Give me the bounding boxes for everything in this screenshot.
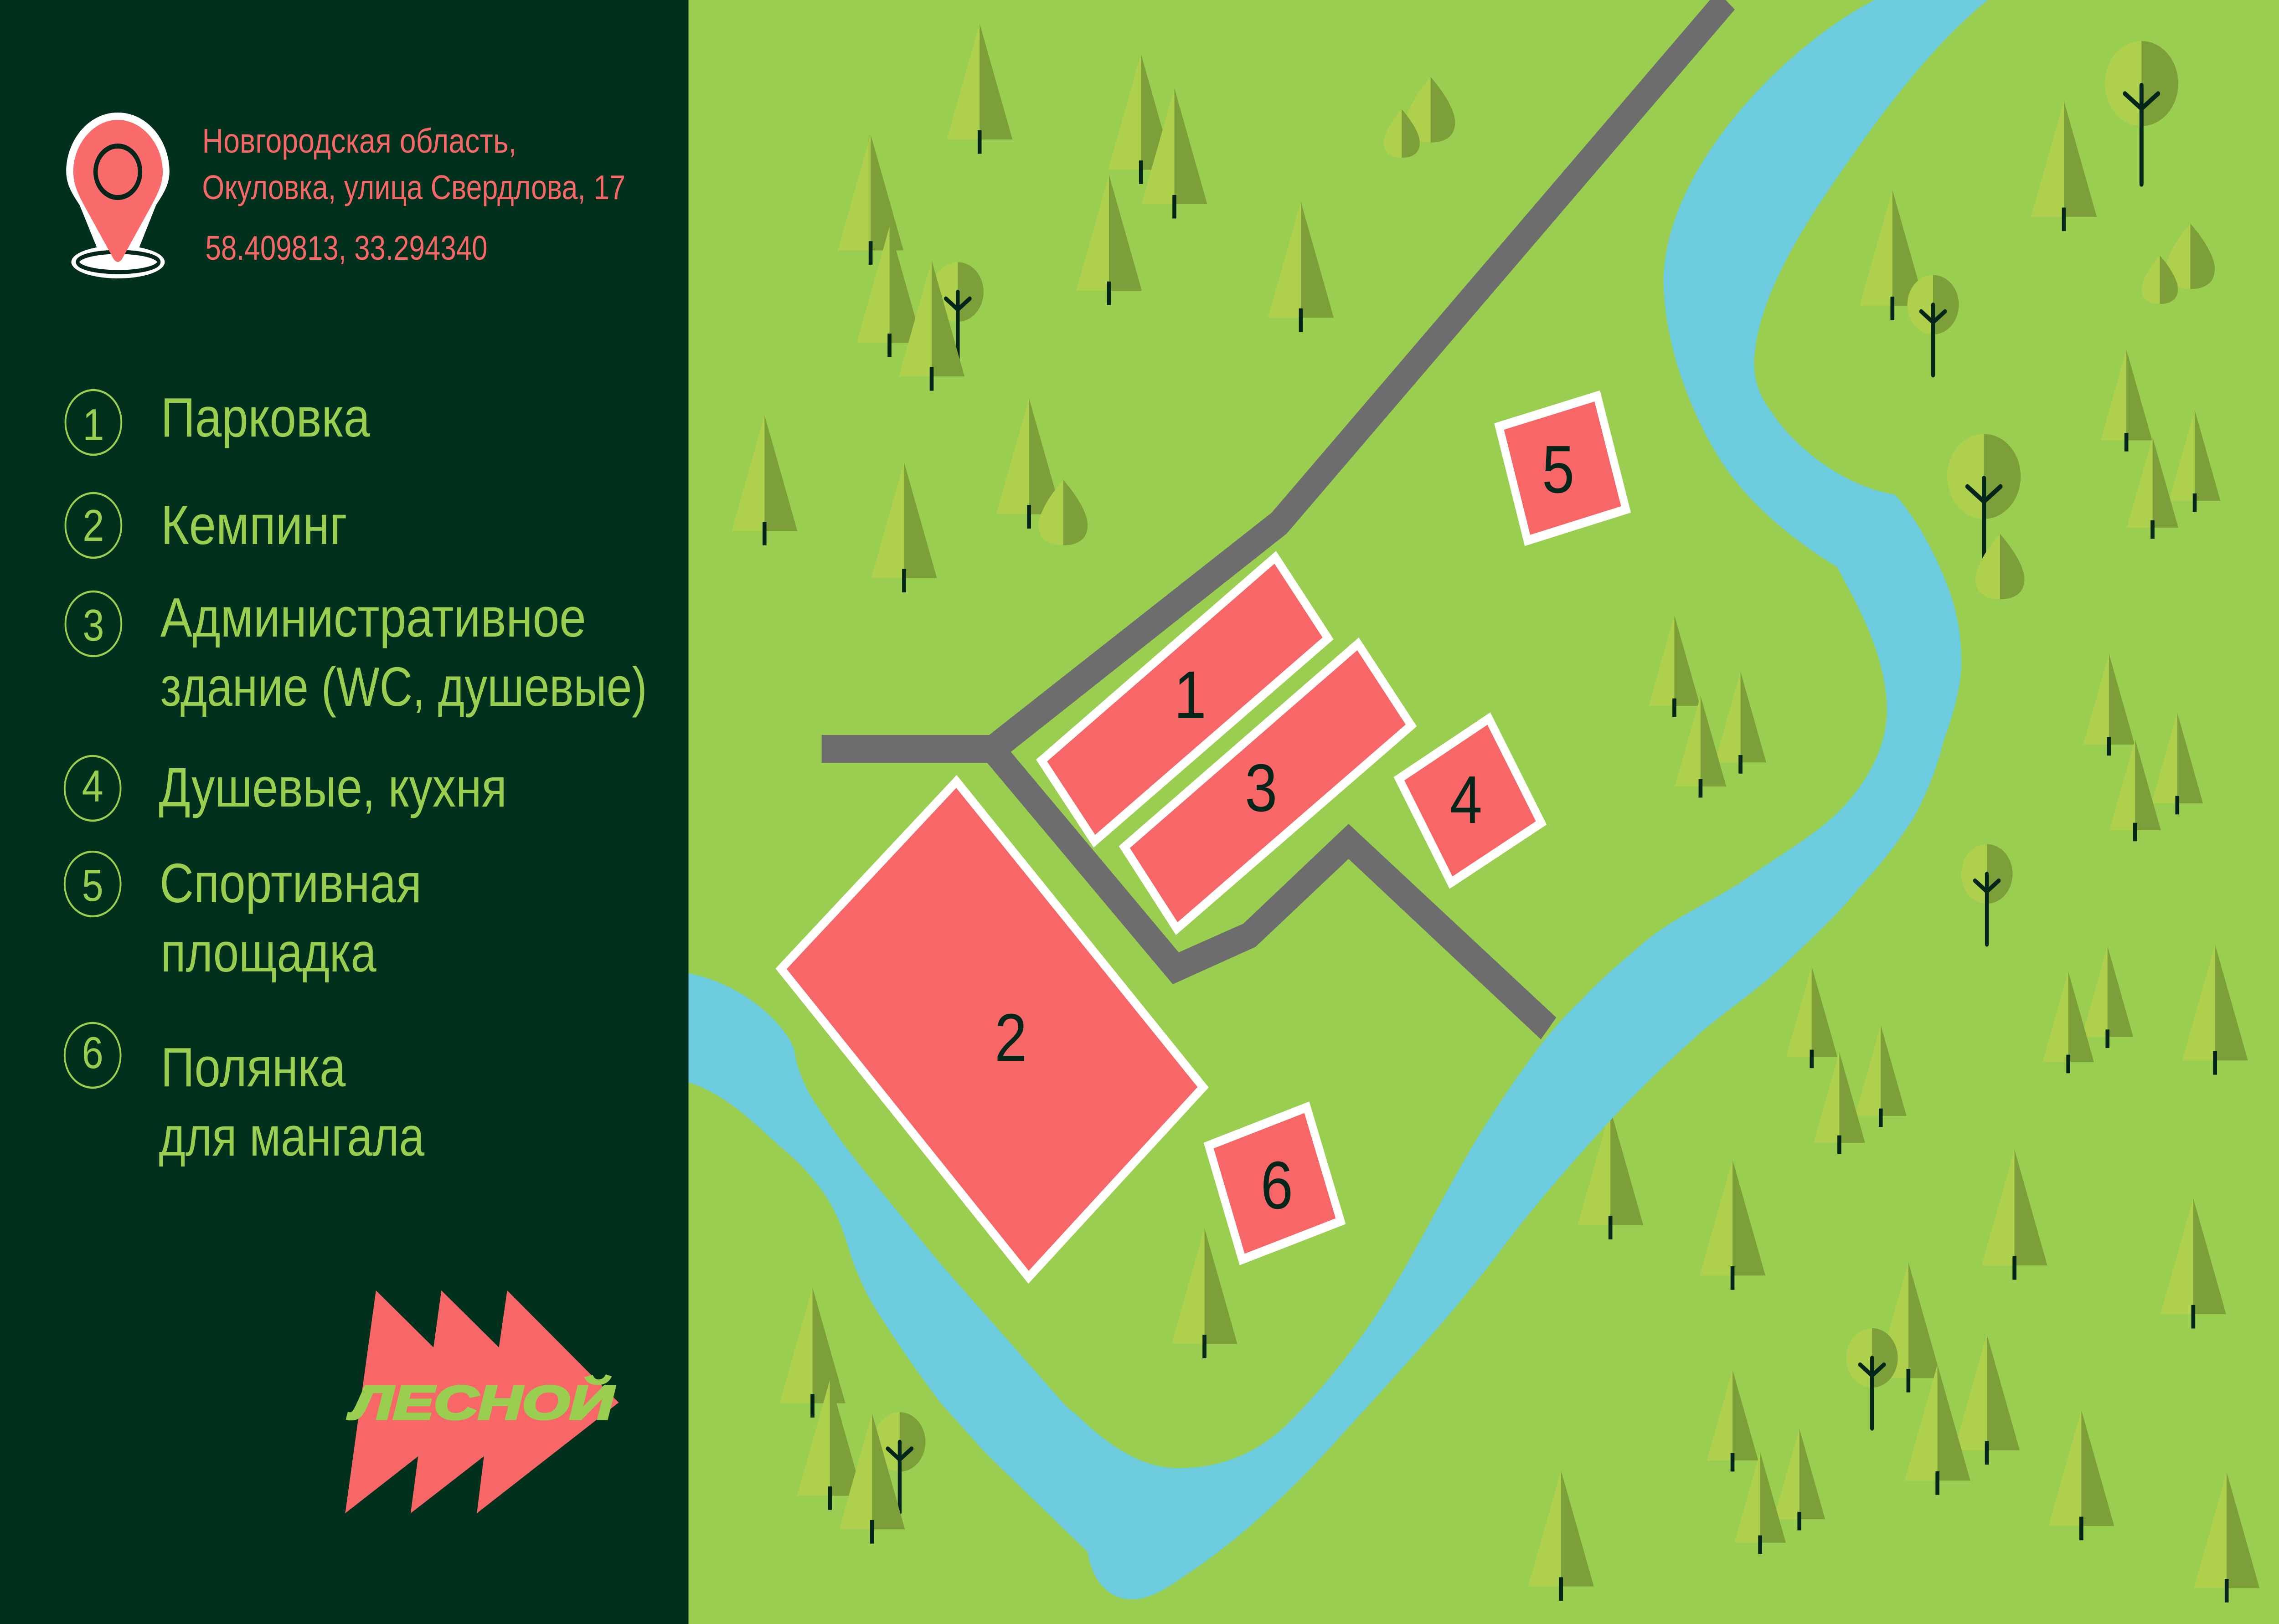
icon: fir tree [1700, 1160, 1765, 1290]
panel: sidebar [0, 0, 688, 1624]
icon: fir tree [1905, 1365, 1970, 1495]
legend item 6: для мангала [159, 1106, 425, 1168]
legend item 5: 5 [82, 861, 103, 910]
icon: fir tree small [2109, 740, 2161, 841]
icon: fir tree [1268, 202, 1334, 332]
legend item 6 [65, 1023, 425, 1168]
legend item 2: Кемпинг [161, 494, 347, 556]
river [670, 0, 1988, 1599]
zone 6: barbecue glade [1209, 1107, 1341, 1259]
icon: fir tree [1954, 1334, 2020, 1465]
icon: fir tree [1141, 88, 1207, 218]
icon: fir tree [779, 1287, 846, 1418]
address and coordinates [202, 122, 625, 267]
legend item 2: 2 [82, 501, 104, 550]
zone 5: sports ground: 5 [1542, 432, 1574, 507]
icon: bush large [1039, 480, 1088, 545]
icon: fir tree [1876, 1262, 1941, 1393]
icon: fir tree [2160, 1198, 2226, 1328]
icon: fir tree [797, 1380, 863, 1510]
legend item 3: 3 [82, 601, 104, 650]
icon: fir tree small [1774, 1429, 1825, 1530]
legend item 3: Административное [160, 587, 586, 649]
legend item 2 [66, 493, 347, 558]
icon: round tree [1908, 275, 1959, 375]
icon: round tree [1961, 844, 2013, 945]
icon: fir tree small [2101, 349, 2152, 452]
icon: fir tree small [1649, 615, 1700, 717]
zone 2: camping [781, 781, 1203, 1277]
icon: fir tree [1171, 1228, 1237, 1358]
address and coordinates: Новгородская область, [202, 122, 516, 160]
icon: fir tree [732, 415, 797, 545]
legend item 5: Спортивная [160, 853, 422, 915]
legend item 1 [66, 387, 370, 455]
icon: round tree [874, 1412, 925, 1512]
icon: bush large [2166, 224, 2215, 289]
icon: round tree [932, 262, 984, 363]
zone 3: admin building [1124, 644, 1411, 929]
icon: bush small [2142, 256, 2178, 304]
icon: round tree [2105, 41, 2178, 185]
legend item 5 [65, 852, 422, 984]
icon: fir tree small [1786, 966, 1837, 1068]
logo: Лесной [345, 1290, 619, 1513]
icon: fir tree small [1855, 1025, 1907, 1127]
legend item 6: 6 [82, 1028, 103, 1078]
legend [65, 387, 647, 1168]
icon: fir tree [2048, 1410, 2114, 1540]
icon: fir tree [838, 134, 903, 265]
icon: fir tree [871, 462, 937, 592]
zone 4: showers and kitchen: 4 [1450, 762, 1482, 838]
icon: fir tree [996, 398, 1062, 529]
icon: fir tree [1108, 54, 1174, 184]
zone 3: admin building: 3 [1245, 750, 1277, 826]
icon: bush large [1975, 534, 2024, 599]
icon: bush large [1406, 77, 1455, 143]
legend item 5: площадка [161, 922, 376, 984]
icon: fir tree small [1734, 1452, 1786, 1554]
icon: fir tree [1982, 1150, 2047, 1280]
icon: location pin [66, 113, 170, 278]
zone 5: sports ground [1499, 396, 1626, 540]
legend item 6: Полянка [161, 1037, 346, 1099]
icon: fir tree [2031, 101, 2097, 231]
icon: fir tree [947, 24, 1012, 154]
icon: fir tree small [1715, 672, 1766, 774]
icon: fir tree small [1675, 696, 1726, 797]
icon: fir tree [1076, 175, 1142, 305]
icon: fir tree small [2127, 437, 2178, 539]
icon: fir tree small [2082, 946, 2133, 1048]
icon: fir tree [899, 261, 964, 391]
icon: fir tree small [1814, 1052, 1865, 1154]
legend item 4: Душевые, кухня [159, 757, 507, 819]
icon: fir tree [2182, 945, 2248, 1075]
zone 1: parking [1042, 557, 1328, 841]
icon: fir tree behind river [1578, 1109, 1643, 1239]
zone 4: showers and kitchen [1399, 719, 1541, 883]
icon: fir tree small [2083, 654, 2135, 755]
zone 6: barbecue glade: 6 [1261, 1148, 1293, 1223]
icon: bush small [1384, 109, 1420, 158]
icon: fir tree [2194, 1472, 2259, 1603]
icon: fir tree [839, 1413, 905, 1544]
icon: fir tree [1860, 190, 1925, 320]
icon: fir tree [856, 227, 923, 357]
zone 2: camping: 2 [995, 1000, 1027, 1075]
icon: round tree [1846, 1328, 1898, 1429]
address and coordinates: 58.409813, 33.294340 [205, 229, 488, 267]
legend item 4: 4 [82, 761, 103, 811]
icon: fir tree small [2042, 971, 2094, 1073]
logo: Лесной: ЛЕСНОЙ [347, 1376, 615, 1429]
icon: fir tree small [2151, 713, 2203, 814]
address and coordinates: Окуловка, улица Свердлова, 17 [202, 169, 625, 206]
legend item 1: Парковка [161, 387, 370, 449]
forest: all trees and bushes [732, 24, 2259, 1603]
icon: round tree [1947, 434, 2021, 577]
legend item 1: 1 [82, 400, 104, 450]
legend item 3: здание (WC, душевые) [160, 656, 647, 718]
zone 1: parking: 1 [1174, 658, 1207, 733]
icon: fir tree [1528, 1470, 1594, 1601]
icon: fir tree small [2169, 410, 2220, 512]
road [822, 0, 1735, 1039]
legend item 3 [66, 587, 647, 718]
icon: fir tree small [1707, 1370, 1758, 1471]
